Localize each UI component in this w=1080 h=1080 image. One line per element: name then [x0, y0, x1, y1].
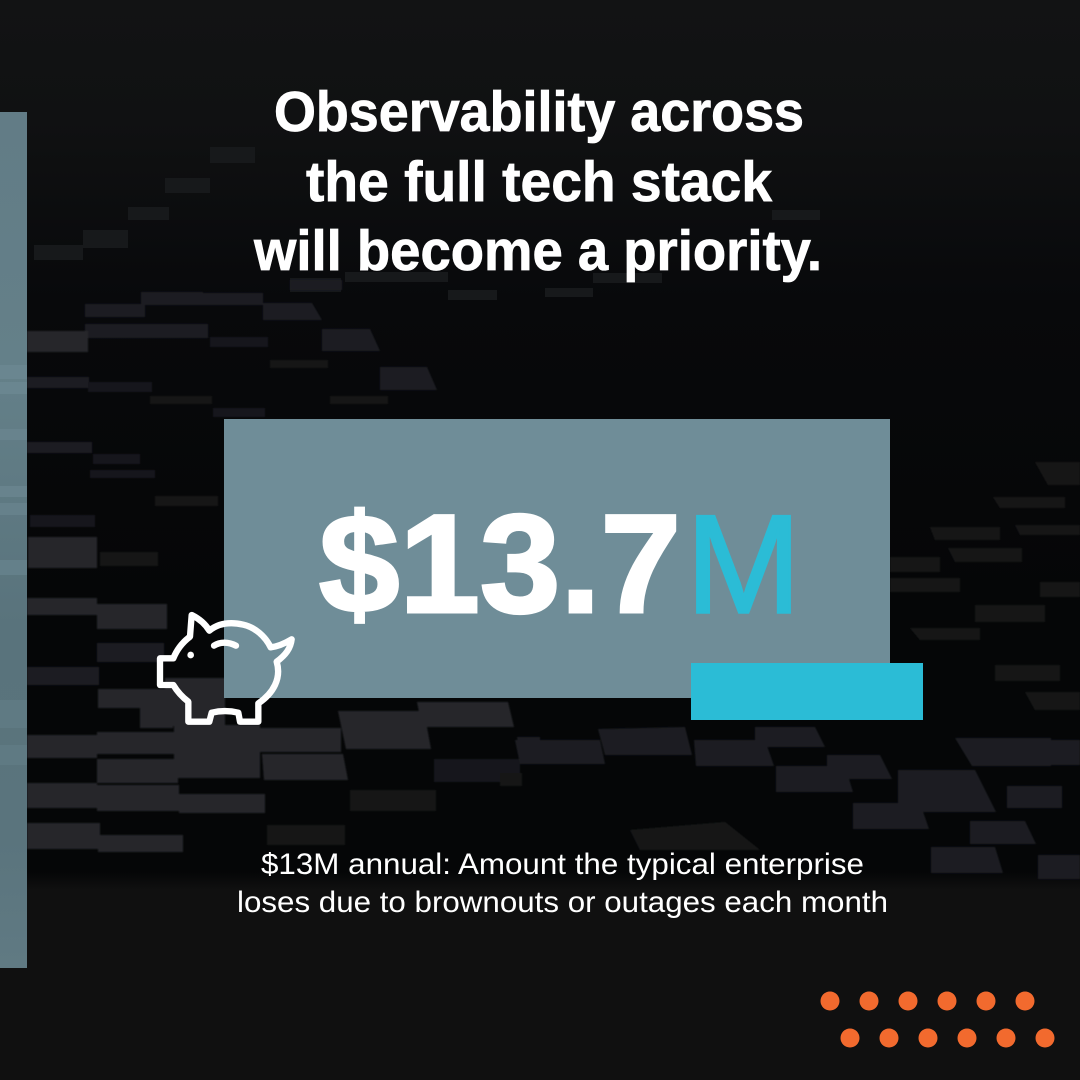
cyan accent bar	[691, 663, 923, 720]
left vertical bar	[0, 112, 27, 968]
background: dark 3D blocks pattern	[27, 147, 1080, 879]
title: will become a priority.	[253, 219, 822, 283]
caption: loses due to brownouts or outages each month	[237, 886, 888, 919]
title	[253, 80, 822, 283]
decorative orange dots	[820, 992, 1054, 1048]
stat value: $13.7	[319, 485, 681, 642]
stat unit: M	[686, 486, 801, 642]
stat panel	[224, 419, 890, 698]
title: Observability across	[274, 80, 804, 144]
icon: piggy bank	[160, 615, 292, 722]
caption	[237, 848, 888, 919]
caption: $13M annual: Amount the typical enterprise	[261, 848, 864, 881]
title: the full tech stack	[306, 150, 772, 214]
